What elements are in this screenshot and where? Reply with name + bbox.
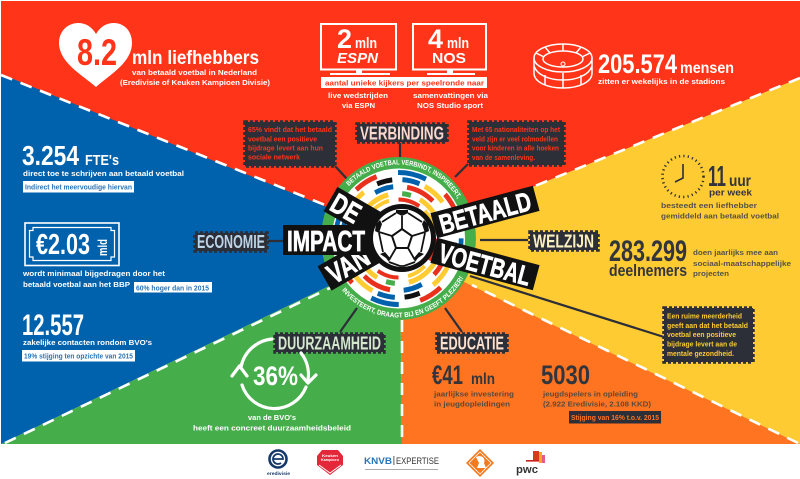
banner: BETAALD: [430, 185, 540, 241]
number: 8.2: 8.2: [77, 32, 117, 73]
text: samenvattingen: [413, 91, 489, 110]
text: live wedstrijden: live wedstrijden: [328, 91, 389, 100]
text: competities: (Eredivisie of Keuken Kampioen Divisie): [120, 78, 271, 87]
ring text: top: BETAALD VOETBAL VERBINDT, INSPIREERT,: [346, 160, 461, 199]
icon: tv ESPN: mln: [355, 35, 377, 52]
panel: welzijn (yellow): [400, 78, 800, 444]
tag: indirect: Indirect het meervoudige hiervan: [25, 182, 132, 192]
central emblem: [283, 157, 540, 320]
icon: banknote frame: [25, 223, 119, 266]
callout: nationaliteiten: voor kinderen in alle hoeken: [472, 144, 559, 152]
callout: mentale gezondheid: [664, 308, 753, 362]
caption bar: aantal unieke kijkers per speelronde naar: [325, 78, 484, 88]
callout: mentale gezondheid: mentale gezondheid.: [667, 349, 734, 358]
stat: 2.03 mld: €2.03: [36, 229, 90, 261]
stat: 283.299 deelnemers: sociaal-maatschappelijke: [693, 259, 791, 268]
connector lines: [268, 143, 664, 337]
icon: stadium: [534, 44, 592, 88]
callout: sociale netwerk: sociale netwerk: [248, 152, 301, 162]
rings and ring text: [322, 157, 476, 320]
callout: sociale netwerk: bijdrage levert aan hun: [248, 144, 323, 152]
icon: tv ESPN: 2: [337, 24, 352, 54]
label: economie: [195, 232, 267, 252]
icon: tv NOS: mln: [447, 35, 469, 52]
stat: 11 uur: 11: [708, 161, 726, 193]
logo: knvb expertise: KNVB: [364, 455, 392, 466]
icon: tv ESPN: [321, 24, 396, 75]
stat: 41 mln: €41: [432, 360, 463, 390]
stat: 11 uur: gemiddeld aan betaald voetbal: [661, 212, 779, 220]
logo: eredivisie: eredivisie: [267, 471, 291, 476]
stat: 41 mln: mln: [471, 371, 495, 388]
logo: keuken kampioen divisie: Kampioen: [321, 458, 339, 462]
stat: 2.03 mld: wordt minimaal bijgedragen door het: [22, 269, 166, 278]
number: 205.574: 205.574: [598, 49, 677, 79]
logo: pwc: pwc: [516, 464, 538, 476]
icon: tv ESPN: ESPN: [337, 50, 379, 67]
text: live wedstrijden: [328, 91, 389, 110]
stat: 8.2 mln liefhebbers: [59, 23, 271, 87]
text: samenvattingen: samenvattingen via: [413, 91, 489, 100]
label: economie: ECONOMIE: [197, 232, 265, 252]
stat: stadium visitors: [534, 44, 734, 88]
ring: green band: [321, 157, 476, 320]
stat: 12.557: [22, 309, 152, 362]
text: stadions caption: zitten er wekelijks in de stadions: [598, 77, 725, 86]
stat: 3.254 FTE's: direct toe te schrijven aan betaald voetbal: [23, 169, 184, 178]
stat: 5030: (2.922 Eredivisie, 2.108 KKD): [543, 400, 652, 408]
tag: 19% stijging: 19% stijging ten opzichte van 2015: [24, 352, 133, 361]
stat: 283.299 deelnemers: projecten: [693, 269, 730, 278]
callout: sociale netwerk: [245, 122, 335, 166]
tag: 60% hoger: 60% hoger dan in 2015: [136, 283, 209, 292]
label: welzijn: WELZIJN: [533, 232, 594, 252]
logo: pwc: [516, 451, 545, 476]
stat: 5030: jeugdspelers in opleiding: [542, 390, 639, 398]
stat: 36%: [193, 339, 352, 432]
callout: mentale gezondheid: voetbal een positieve: [667, 330, 736, 339]
callout: sociale netwerk: voetbal een positieve: [248, 134, 317, 144]
callout: mentale gezondheid: Een ruime meerderheid: [667, 312, 742, 320]
callout: mentale gezondheid: geeft aan dat het betaald: [667, 321, 748, 330]
stat: 3.254 FTE's: [22, 140, 184, 192]
stat: 3.254 FTE's: 3.254: [22, 140, 79, 171]
stat: 283.299 deelnemers: doen jaarlijks mee aan: [693, 248, 779, 257]
banner: DE: [322, 186, 386, 241]
stat: 283.299 deelnemers: [609, 235, 791, 280]
label: verbinding: VERBINDING: [360, 124, 444, 144]
logo: knvb lion: [466, 449, 494, 477]
stat: 2.03 mld: mld: [95, 239, 110, 256]
rings: flag colours: [336, 172, 461, 304]
stat: 11 uur: per week: [709, 188, 753, 198]
icon: tv NOS: 4: [428, 24, 443, 54]
ring text: bottom: INVESTEERT, DRAAGT BIJ EN GEEFT PLEZIER!: [342, 276, 464, 318]
panel: verbinding (red): [1, 1, 800, 241]
icon: clock: [662, 156, 704, 197]
stat: 5030: [541, 360, 661, 424]
stat: 12.557: zakelijke contacten rondom BVO's: [23, 338, 152, 347]
callout: nationaliteiten: [469, 122, 564, 165]
stat: 41 mln: jaarlijkse investering: [433, 390, 515, 398]
stat: 36%: 36%: [253, 361, 298, 391]
icon: football: [368, 204, 436, 272]
text: samenvattingen: NOS Studio sport: [417, 101, 484, 110]
logos: [267, 449, 545, 477]
stat: 41 mln: in jeugdopleidingen: [434, 400, 511, 408]
label: educatie: EDUCATIE: [440, 334, 504, 354]
label: duurzaamheid: DUURZAAMHEID: [278, 334, 381, 354]
callout: sociale netwerk: 65% vindt dat het betaald: [248, 125, 332, 134]
logo: eredivisie: [267, 450, 291, 476]
logo: keuken kampioen divisie: Keuken: [322, 454, 338, 458]
stat: 11 uur: uur: [729, 173, 751, 190]
stat: 36%: van de BVO's: [248, 413, 296, 422]
stat: 2.03 mld: betaald voetbal aan het BBP: [23, 280, 130, 289]
callout: mentale gezondheid: bijdrage levert aan de: [667, 340, 737, 348]
text: van betaald voetbal: van betaald voetbal in Nederland: [132, 68, 258, 77]
stat: 36%: heeft een concreet duurzaamheidsbeleid: [193, 424, 352, 432]
banner: VAN: VAN: [321, 241, 375, 290]
icon: tv NOS: NOS: [432, 50, 466, 67]
logo: knvb expertise: [364, 455, 439, 470]
callout: nationaliteiten: veld zijn er veel rolmodellen: [472, 134, 558, 144]
heading: mln liefhebbers: mln liefhebbers: [132, 48, 259, 69]
banner: VOETBAL: VOETBAL: [435, 238, 534, 292]
panel: economie (blue): [1, 74, 400, 444]
text: live wedstrijden: via ESPN: [342, 101, 375, 110]
logo: knvb expertise: EXPERTISE: [396, 456, 439, 466]
icon: cycle arrows: [232, 339, 316, 409]
stat: 11 uur: besteedt een liefhebber: [661, 201, 757, 210]
stat: 283.299 deelnemers: 283.299: [609, 235, 687, 268]
banner: VOETBAL: [430, 237, 540, 293]
stat: 3.254 FTE's: FTE's: [85, 152, 119, 169]
panel: educatie (orange): [400, 251, 800, 444]
stat: 5030: 5030: [541, 360, 590, 390]
icon: tv NOS: [413, 24, 486, 75]
callout: nationaliteiten: van de samenleving.: [472, 153, 535, 162]
stat: 12.557: 12.557: [22, 309, 84, 342]
callout: nationaliteiten: Met 65 nationaliteiten op het: [472, 125, 560, 134]
tag: stijging: Stijging van 16% t.o.v. 2015: [571, 413, 659, 422]
stat: tv viewers: [321, 24, 489, 110]
panel: duurzaamheid (green): [1, 252, 402, 444]
banner: BETAALD: BETAALD: [436, 186, 535, 240]
logo: keuken kampioen divisie: [317, 450, 343, 475]
icon: heart: [59, 23, 132, 87]
stat: 11 uur: [661, 156, 779, 220]
stat: 41 mln: [432, 360, 515, 408]
stat: 2.03 mld: [22, 223, 212, 292]
banner: DE: DE: [325, 188, 367, 229]
stat: 283.299 deelnemers: deelnemers: [609, 261, 687, 280]
text: mensen: mensen: [680, 60, 734, 77]
banner: IMPACT: IMPACT: [287, 226, 365, 258]
